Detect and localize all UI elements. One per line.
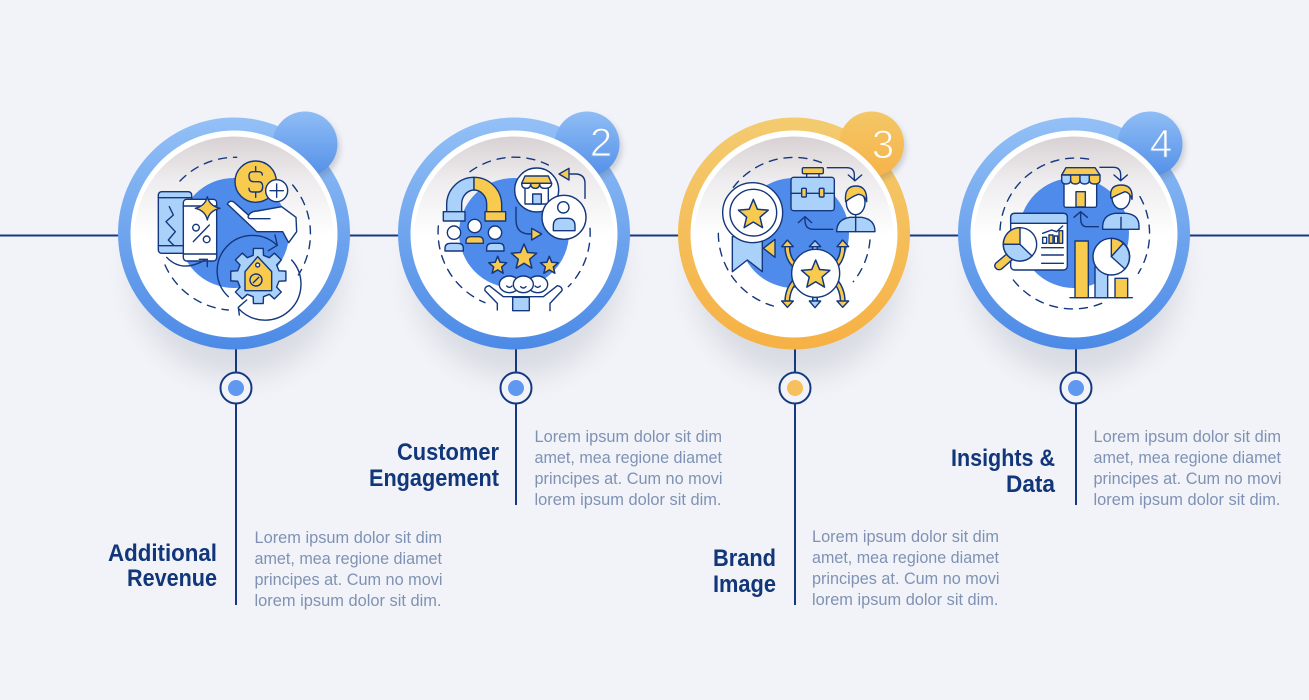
spreading arrows [782, 240, 849, 308]
pie chart [1093, 238, 1130, 275]
number 2: 2 [590, 121, 612, 165]
icon: engagement magnet, store, stars, people [438, 157, 590, 311]
gear with tag [231, 248, 286, 304]
dashboard [1011, 213, 1067, 270]
number 3: 3 [872, 123, 894, 167]
badge shadow 3 [842, 116, 906, 180]
coin [235, 161, 276, 202]
step 2: customer engagement [369, 112, 722, 509]
medal [723, 183, 783, 272]
body text 1: principes at. Cum no movi [254, 571, 442, 589]
phone arrow [167, 257, 207, 267]
icon: brand medal, briefcase, person, star [718, 157, 875, 308]
icon: revenue hand, phones and gear [158, 157, 310, 320]
body text 1: Lorem ipsum dolor sit dim [254, 529, 442, 547]
body text 1: amet, mea regione diamet [254, 550, 442, 568]
body text 2: Lorem ipsum dolor sit dim [534, 428, 722, 446]
icon: insights store, dashboard and charts [995, 158, 1150, 309]
step 3: brand image [678, 112, 1000, 609]
body text 3: lorem ipsum dolor sit dim. [812, 591, 998, 609]
badge shadow 2 [558, 116, 622, 180]
number badge 3 [839, 112, 904, 176]
white disc 1 [130, 130, 338, 338]
heading: additional revenue: Revenue [127, 565, 217, 592]
body text 3 [812, 528, 1000, 609]
heading: insights and data [951, 445, 1056, 498]
heading: customer engagement [369, 439, 499, 492]
body text 3: amet, mea regione diamet [812, 549, 999, 567]
connector stem 4 [1075, 345, 1077, 505]
number 4: 4 [1150, 122, 1172, 166]
outer ring 1 [118, 118, 350, 350]
person circle [542, 195, 586, 239]
connector stem 3 [794, 345, 796, 605]
outer ring 3 [678, 118, 910, 350]
body text 2: principes at. Cum no movi [534, 470, 722, 488]
step 4: insights and data [951, 112, 1282, 509]
heading: insights and data: Insights & [951, 445, 1055, 472]
body text 1 [254, 529, 442, 610]
back phone [158, 192, 192, 253]
three customers [445, 219, 504, 251]
hand [227, 201, 297, 243]
body text 4 [1094, 428, 1282, 509]
timeline node 3 [780, 372, 810, 404]
connector stem 1 [235, 345, 237, 605]
timeline node 1 [220, 372, 252, 404]
store [1062, 168, 1100, 207]
number badge 2 [554, 112, 620, 176]
person [837, 186, 875, 232]
white disc 2 [410, 130, 618, 338]
body text 2: amet, mea regione diamet [534, 449, 722, 467]
body text 4: principes at. Cum no movi [1094, 470, 1282, 488]
connector stem 2 [515, 345, 517, 505]
step 1: additional revenue [108, 112, 442, 610]
heading: additional revenue [108, 540, 217, 592]
sparkle [195, 197, 220, 220]
white disc 4 [970, 130, 1178, 338]
body text 2: lorem ipsum dolor sit dim. [534, 491, 722, 509]
heading: brand image: Image [713, 571, 776, 598]
body text 4: lorem ipsum dolor sit dim. [1094, 491, 1280, 509]
body text 1: lorem ipsum dolor sit dim. [254, 592, 442, 610]
heading: brand image: Brand [713, 545, 776, 572]
raised hands and faces [485, 276, 562, 311]
body text 3: Lorem ipsum dolor sit dim [812, 528, 999, 546]
circle shadow 2 [414, 171, 620, 377]
heading: additional revenue: Additional [108, 540, 217, 567]
horizontal timeline line [0, 234, 1309, 236]
body text 4: amet, mea regione diamet [1094, 449, 1281, 467]
rating stars [489, 244, 558, 273]
magnifier with pie [995, 228, 1037, 270]
body text 3: principes at. Cum no movi [812, 570, 1000, 588]
badge shadow 4 [1121, 116, 1185, 180]
timeline node 2 [500, 372, 532, 404]
heading: customer engagement: Customer [397, 439, 499, 466]
store circle [515, 168, 559, 212]
number badge 4 [1118, 112, 1182, 176]
gear cycle arrows [217, 235, 301, 320]
circle shadow 3 [694, 171, 900, 377]
heading: brand image [713, 545, 776, 598]
plus badge [266, 180, 288, 202]
body text 4: Lorem ipsum dolor sit dim [1094, 428, 1281, 446]
star circle [792, 249, 840, 297]
circle shadow 4 [974, 171, 1180, 377]
bar chart [1070, 241, 1132, 298]
timeline node 4 [1060, 372, 1092, 404]
flow arrows [516, 168, 585, 240]
badge shadow 1 [276, 116, 340, 180]
arrows between case and person [798, 168, 862, 229]
arrows between store and person [1074, 167, 1127, 227]
front phone with percent [183, 199, 217, 261]
briefcase [791, 168, 834, 211]
person [1103, 185, 1139, 229]
body text 2 [534, 428, 722, 509]
outer ring 4 [958, 118, 1190, 350]
heading: customer engagement: Engagement [369, 465, 499, 492]
outer ring 2 [398, 118, 630, 350]
heading: insights and data: Data [1006, 471, 1056, 498]
number badge 1 [272, 112, 338, 176]
circle shadow 1 [134, 171, 340, 377]
white disc 3 [690, 130, 898, 338]
magnet [443, 177, 506, 221]
